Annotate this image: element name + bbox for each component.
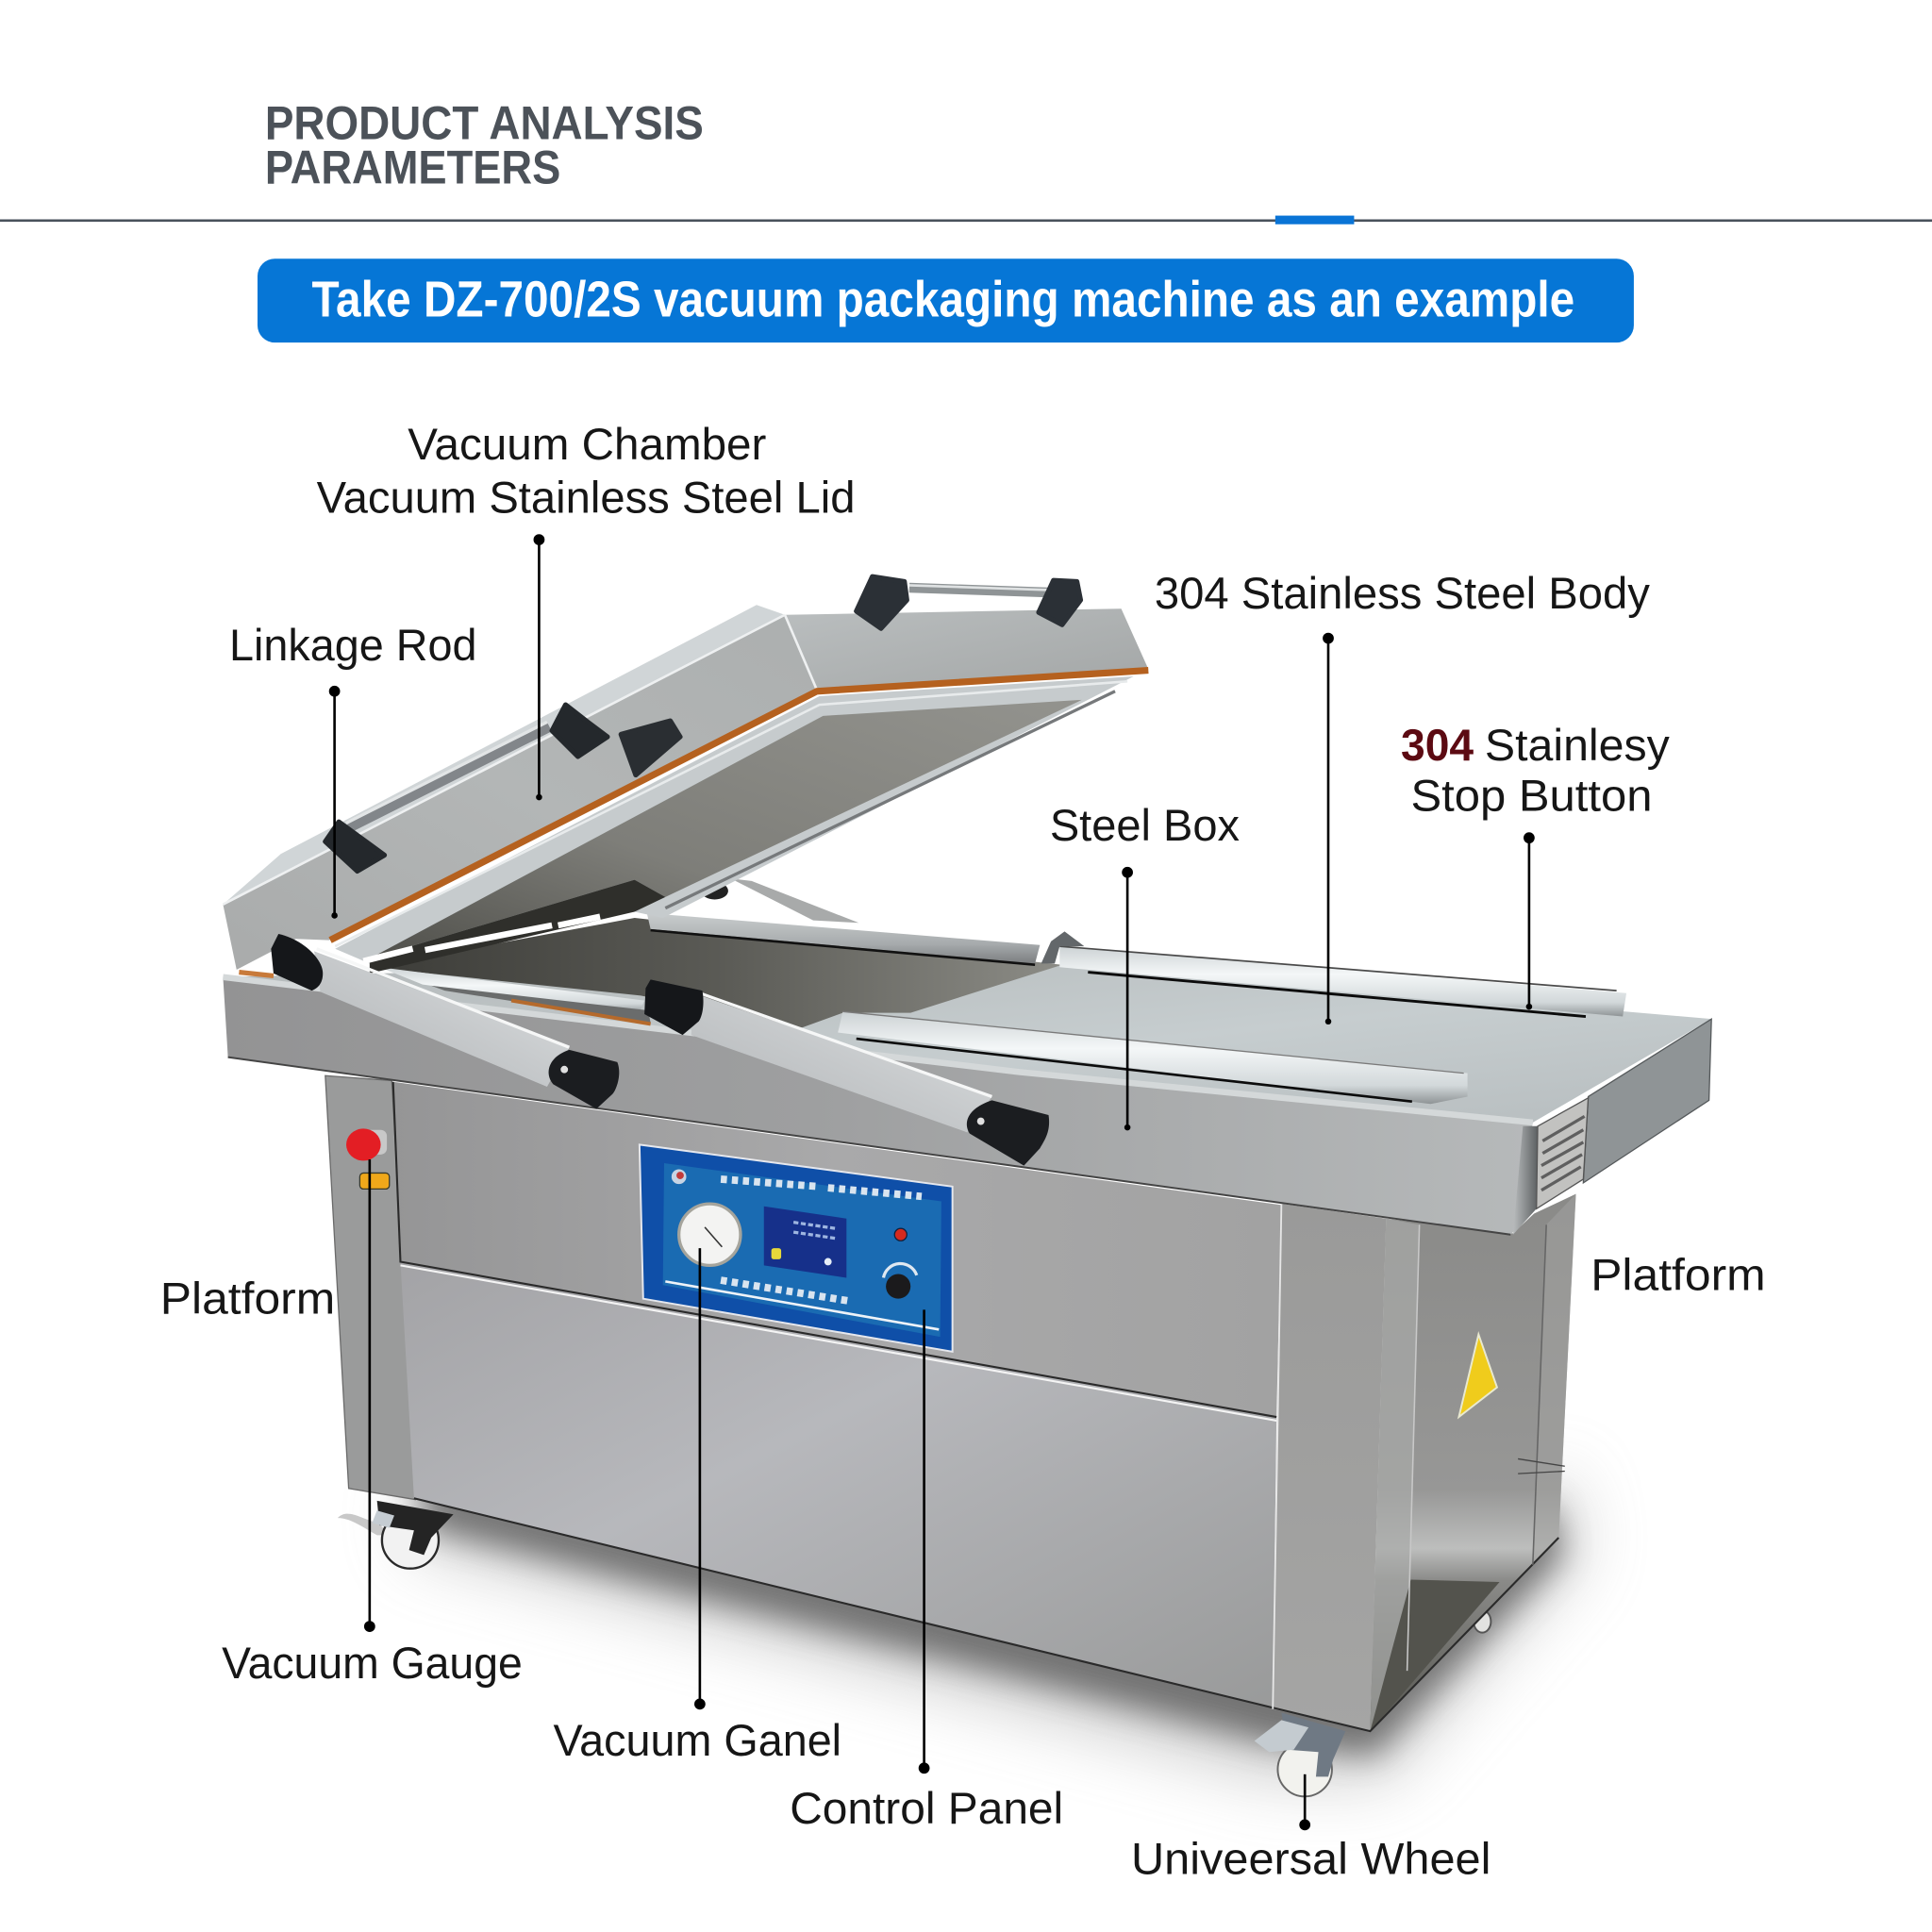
callout: stainless steel body (1155, 568, 1650, 1024)
example banner (258, 258, 1634, 342)
right caster (1255, 1713, 1345, 1796)
table right edge (1583, 1019, 1711, 1183)
indicator light (894, 1228, 907, 1241)
yellow tag (359, 1173, 390, 1189)
front sealing bar (838, 1011, 1468, 1104)
label: platform right: Platform (1591, 1250, 1766, 1300)
callout: universal wheel (1131, 1774, 1491, 1884)
raised lid (223, 605, 1148, 974)
callout: universal wheel: Univeersal Wheel (1131, 1834, 1491, 1884)
left sealing rod (379, 967, 651, 1023)
callout: vacuum chamber lid (317, 419, 855, 800)
table corner (1513, 1126, 1538, 1235)
callout: stop button: Stop Button (1411, 770, 1653, 820)
emergency stop button (346, 1128, 387, 1160)
callout: steel box: Steel Box (1050, 800, 1240, 850)
panel logo (672, 1170, 687, 1184)
callout: linkage rod: Linkage Rod (229, 620, 476, 670)
hinge (1041, 931, 1084, 963)
callout: vacuum ganel (553, 1248, 841, 1765)
panel caption marks (721, 1280, 850, 1301)
floor shadow (407, 1466, 1583, 1780)
title: PARAMETERS (265, 142, 560, 194)
lid side handle (325, 705, 680, 871)
callout: control panel: Control Panel (790, 1783, 1063, 1833)
vacuum packaging machine illustration (223, 576, 1711, 1796)
table top surface (223, 965, 1711, 1123)
warning sticker (1458, 1335, 1497, 1417)
table front edge (223, 977, 1533, 1235)
display screen (764, 1207, 846, 1277)
gasket strip (511, 1001, 651, 1024)
label: platform left: Platform (160, 1273, 335, 1323)
title: PRODUCT ANALYSIS (265, 97, 704, 150)
lower lid support (701, 878, 858, 923)
linkage arm right (644, 979, 1049, 1166)
callout: linkage rod (229, 620, 476, 919)
right sealing bar (1059, 946, 1626, 1017)
callout: vacuum gauge (222, 1159, 523, 1688)
lid top handle (857, 576, 1080, 628)
header rule with blue accent (0, 216, 1932, 225)
page header (0, 97, 1932, 342)
callout: vacuum gauge: Vacuum Gauge (222, 1638, 523, 1688)
vacuum chamber interior (370, 918, 1062, 1027)
linkage arm left (271, 934, 619, 1109)
panel heading marks (721, 1179, 922, 1196)
lid vent slots (363, 917, 600, 961)
callout: stop button: 304 (1401, 720, 1474, 770)
rear sealing bar (647, 913, 1040, 965)
adjustment knob (883, 1264, 917, 1299)
callout: stop button (1401, 720, 1670, 1009)
machine body (325, 1075, 1576, 1731)
vacuum gauge dial (679, 1204, 741, 1265)
callout: vacuum chamber lid: Vacuum Stainless Steel Lid (317, 472, 855, 522)
callout: control panel (790, 1309, 1063, 1833)
left caster (338, 1501, 454, 1569)
control panel (640, 1144, 953, 1352)
callout: stainless steel body: 304 Stainless Steel Body (1155, 568, 1650, 618)
title (265, 97, 704, 194)
callout: vacuum chamber lid: Vacuum Chamber (408, 419, 766, 469)
rating sticker (1537, 1098, 1589, 1208)
callout: vacuum ganel: Vacuum Ganel (553, 1715, 841, 1765)
orange seal end (239, 973, 274, 975)
example banner: Take DZ-700/2S vacuum packaging machine as an example (311, 273, 1574, 328)
callout: steel box (1050, 800, 1240, 1130)
far caster (1474, 1610, 1491, 1633)
callout: stop button: Stainlesy (1485, 720, 1670, 770)
